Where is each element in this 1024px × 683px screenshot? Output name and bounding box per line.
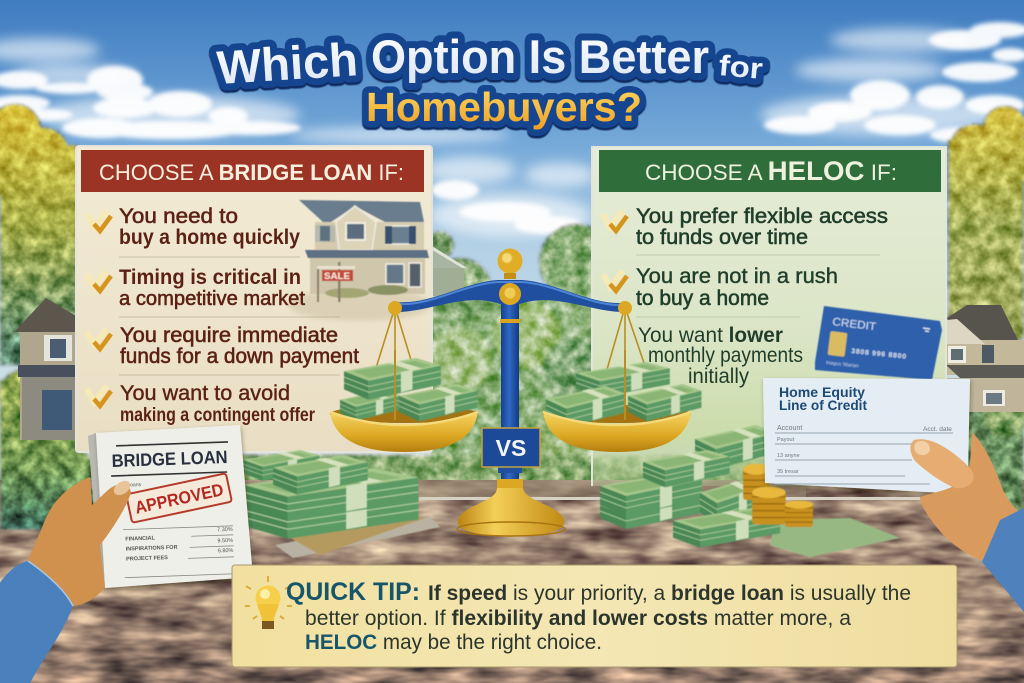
background: ground xyxy=(0,480,1024,683)
top finial xyxy=(498,248,522,274)
base xyxy=(457,465,565,536)
document: home equity line of credit: Payout xyxy=(777,437,795,443)
document: home equity line of credit: Home Equity xyxy=(779,385,866,400)
background: right house xyxy=(945,305,1024,412)
item 2: to buy a home xyxy=(636,287,769,310)
money on right pan xyxy=(546,362,701,428)
panel header: bridge loan xyxy=(81,150,424,192)
background: sky and clouds xyxy=(0,0,1024,500)
panel header: heloc xyxy=(599,150,941,192)
document: bridge loan approved: 9.50% xyxy=(217,538,233,544)
item 1: You need to xyxy=(119,205,238,228)
icon: light bulb xyxy=(245,576,292,629)
left pan xyxy=(330,412,478,452)
document: bridge loan approved: INSPIRATIONS FOR xyxy=(126,545,178,553)
hand: right xyxy=(910,432,1024,612)
quick tip text: If speed is your priority, a bridge loan is usually the xyxy=(428,582,911,605)
quick tip text: better option. If flexibility and lower costs matter more, a xyxy=(305,607,851,630)
document: bridge loan approved: 7.30% xyxy=(217,527,233,533)
item 1: to funds over time xyxy=(636,226,808,249)
item 3 xyxy=(87,324,359,368)
money on left pan xyxy=(340,358,478,421)
document: home equity line of credit: 35 tresar xyxy=(777,469,799,475)
item 3: initially xyxy=(688,365,749,388)
sleeve: right xyxy=(982,508,1024,612)
pivot xyxy=(499,283,521,305)
document: bridge loan approved xyxy=(88,425,253,588)
money pile: ground left xyxy=(243,450,440,558)
beam xyxy=(397,280,624,312)
balance scale xyxy=(330,248,701,536)
panel header: heloc: CHOOSE A HELOC IF: xyxy=(645,156,897,186)
quick tip text: HELOC may be the right choice. xyxy=(305,631,602,654)
title: Option Is Better xyxy=(371,30,709,83)
item 1 xyxy=(603,205,888,249)
title: Homebuyers? xyxy=(366,84,642,130)
credit card: 3808 996 8800 xyxy=(851,348,907,361)
item 2: Timing is critical in xyxy=(119,266,301,289)
coins xyxy=(743,464,813,527)
title xyxy=(215,30,764,130)
item 1: You prefer flexible access xyxy=(636,205,888,228)
background: right trees xyxy=(948,106,1024,340)
sale sign: SALE xyxy=(324,271,350,281)
scale right chains xyxy=(604,307,645,420)
panel header: bridge loan: CHOOSE A BRIDGE LOAN IF: xyxy=(99,160,404,185)
document: home equity line of credit: 13 anyne xyxy=(777,453,800,459)
vs badge: VS xyxy=(496,435,526,461)
item 2 xyxy=(87,266,305,310)
vs badge xyxy=(482,428,540,467)
background: left house xyxy=(14,298,76,440)
hand: left xyxy=(0,477,133,683)
quick tip text xyxy=(286,578,911,654)
item 3: You require immediate xyxy=(120,324,338,347)
list: heloc reasons xyxy=(603,205,888,388)
item 3: You want lower xyxy=(638,324,783,347)
background: left trees xyxy=(0,104,78,365)
item 2 xyxy=(603,265,838,310)
callout: quick tip xyxy=(232,565,957,667)
item 2: You are not in a rush xyxy=(636,265,838,288)
list: bridge loan reasons xyxy=(87,205,359,426)
illustration: house for sale xyxy=(288,200,432,321)
background: distant trees xyxy=(235,224,865,485)
doc heading: BRIDGE LOAN xyxy=(111,447,228,471)
credit card xyxy=(815,306,942,380)
item 3: funds for a down payment xyxy=(120,345,359,368)
background: right shrubs xyxy=(965,393,1024,540)
item 4 xyxy=(87,382,316,426)
document: bridge loan approved: PROJECT FEES xyxy=(126,555,168,563)
item 1 xyxy=(87,205,300,249)
document: bridge loan approved: 6.80% xyxy=(218,548,234,554)
item 1: buy a home quickly xyxy=(119,226,300,249)
document: home equity line of credit xyxy=(763,378,970,493)
credit card: CREDIT xyxy=(832,316,877,333)
quick tip text: QUICK TIP: xyxy=(286,578,420,606)
post xyxy=(501,300,519,505)
list item dividers xyxy=(119,257,340,375)
approved stamp: APPROVED xyxy=(133,479,225,518)
background: left shrubs xyxy=(0,369,103,530)
item 3 xyxy=(638,324,803,388)
money pile: ground right xyxy=(600,425,900,557)
title: for xyxy=(717,50,764,86)
document: bridge loan approved: FINANCIAL xyxy=(125,536,156,543)
item 2: a competitive market xyxy=(119,288,305,310)
sleeve: left xyxy=(0,561,73,683)
background: small centre house xyxy=(432,246,467,296)
item 4: You want to avoid xyxy=(120,382,290,405)
right pan xyxy=(543,412,691,452)
item 4: making a contingent offer xyxy=(120,405,316,426)
sale sign xyxy=(317,262,355,302)
scale left chains xyxy=(376,307,411,420)
document: bridge loan approved: Loans xyxy=(127,482,142,488)
panel: heloc xyxy=(591,146,947,486)
document: home equity line of credit: Account xyxy=(777,425,802,432)
credit card: Inagus 'Marian xyxy=(826,360,859,369)
item 3: monthly payments xyxy=(648,344,803,367)
document: home equity line of credit: Acct. date xyxy=(923,426,952,433)
title: Which xyxy=(215,32,359,94)
panel: bridge loan xyxy=(76,146,432,452)
document: home equity line of credit: Line of Credit xyxy=(779,398,868,413)
